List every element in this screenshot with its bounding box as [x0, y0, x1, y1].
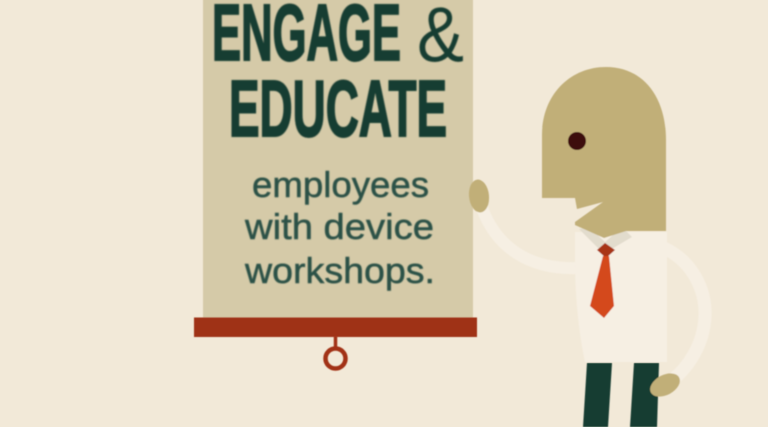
text block: employees with device workshops: workshops.: [244, 250, 435, 291]
shirt torso: [575, 232, 667, 362]
presenter figure: [467, 67, 705, 427]
text block: employees with device workshops: [244, 164, 435, 291]
eye: [568, 132, 586, 150]
panel: projection screen: [194, 0, 477, 368]
collar: [579, 227, 632, 250]
screen surface: [203, 0, 473, 318]
pull cord and ring: [326, 336, 346, 368]
title: engage and educate: EDUCATE: [229, 64, 447, 153]
raised arm: [482, 208, 578, 268]
screen bottom bar: [194, 318, 477, 337]
lowered arm: [664, 248, 705, 380]
necktie: [590, 243, 615, 318]
legs: [583, 363, 659, 427]
text block: employees with device workshops: employees: [252, 164, 429, 205]
text block: employees with device workshops: with device: [244, 206, 434, 247]
head: [542, 67, 666, 238]
left hand: [467, 179, 491, 213]
right hand: [646, 369, 684, 401]
title: engage and educate: [212, 0, 464, 153]
